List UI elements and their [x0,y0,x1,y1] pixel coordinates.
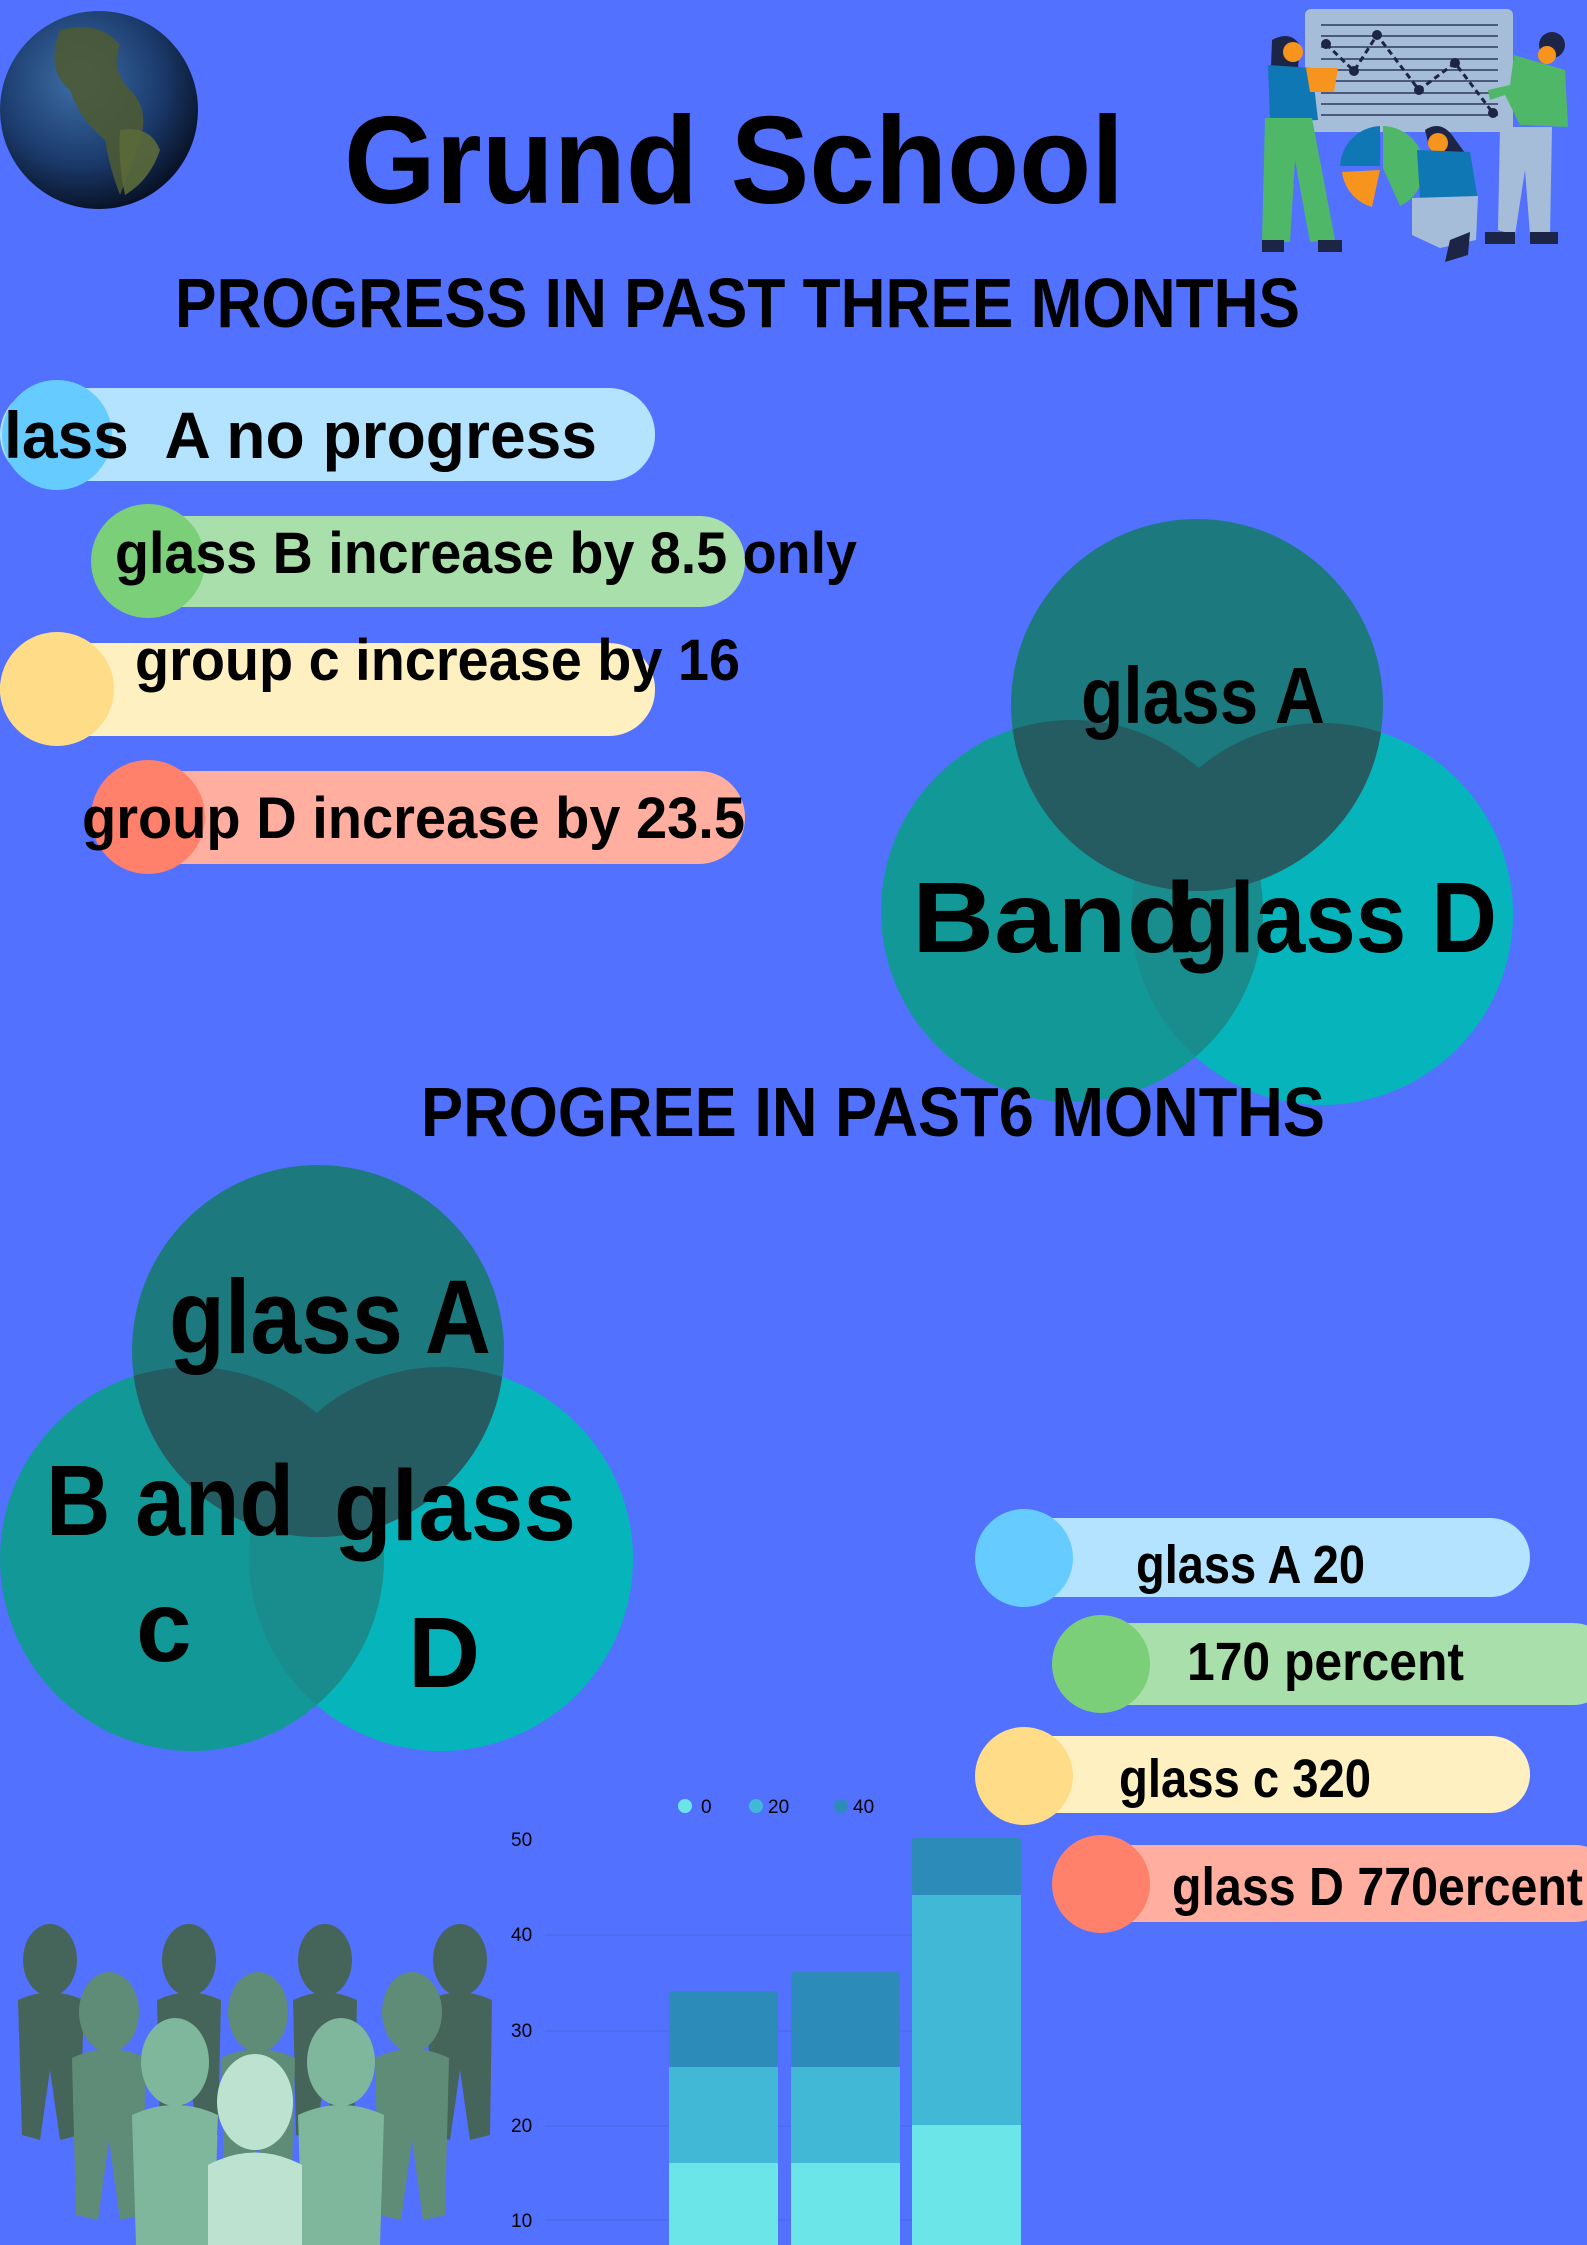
stacked bar chart [511,1797,1021,2245]
venn diagram: three months [881,519,1513,1105]
icon: globe [0,11,198,209]
pill: glass B: glass B increase by 8.5 only [115,521,857,586]
stacked bar chart: 40 [853,1797,874,1818]
venn diagram: three months: glass D [1174,862,1497,974]
pill: group D: group D increase by 23.5 [82,786,745,851]
pill: 170 percent: 170 percent [1187,1632,1464,1692]
pill: 170 percent [1052,1615,1587,1713]
heading: progress in past 6 months: PROGREE IN PAST6 MONTHS [421,1073,1325,1151]
icon: group of people [18,1924,492,2245]
stacked bar chart: 20 [511,2116,532,2137]
venn diagram: six months: glass [334,1450,576,1562]
title: Grund School [344,92,1124,230]
stacked bar chart: 40 [511,1925,532,1946]
pill: class A no progress [0,380,655,490]
pill: glass c 320 [975,1727,1530,1825]
stacked bar chart: 0 [701,1797,712,1818]
pill: glass c 320: glass c 320 [1119,1749,1371,1809]
pill: group c [0,628,740,746]
venn diagram: three months: Band [912,862,1196,974]
venn diagram: six months: D [408,1597,480,1709]
pill: glass A 20 [975,1509,1530,1607]
stacked bar chart: 20 [768,1797,789,1818]
pill: class A no progress: lass A no progress [4,398,597,472]
venn diagram: three months: glass A [1081,651,1325,740]
pill: glass A 20: glass A 20 [1136,1535,1365,1595]
illustration: team with chart [1262,9,1568,262]
venn diagram: six months: glass A [169,1259,491,1376]
pill: group D [82,760,745,874]
heading: progress in past three months: PROGRESS IN PAST THREE MONTHS [175,264,1300,342]
venn diagram: six months: c [136,1571,192,1683]
pill: glass B [91,504,857,618]
stacked bar chart: 30 [511,2021,532,2042]
stacked bar chart: 10 [511,2211,532,2232]
venn diagram: six months [0,1165,633,1751]
pill: group c: group c increase by 16 [135,628,740,693]
pill: glass D 770ercent [1052,1835,1587,1933]
venn diagram: six months: B and [46,1445,294,1557]
stacked bar chart: 50 [511,1830,532,1851]
